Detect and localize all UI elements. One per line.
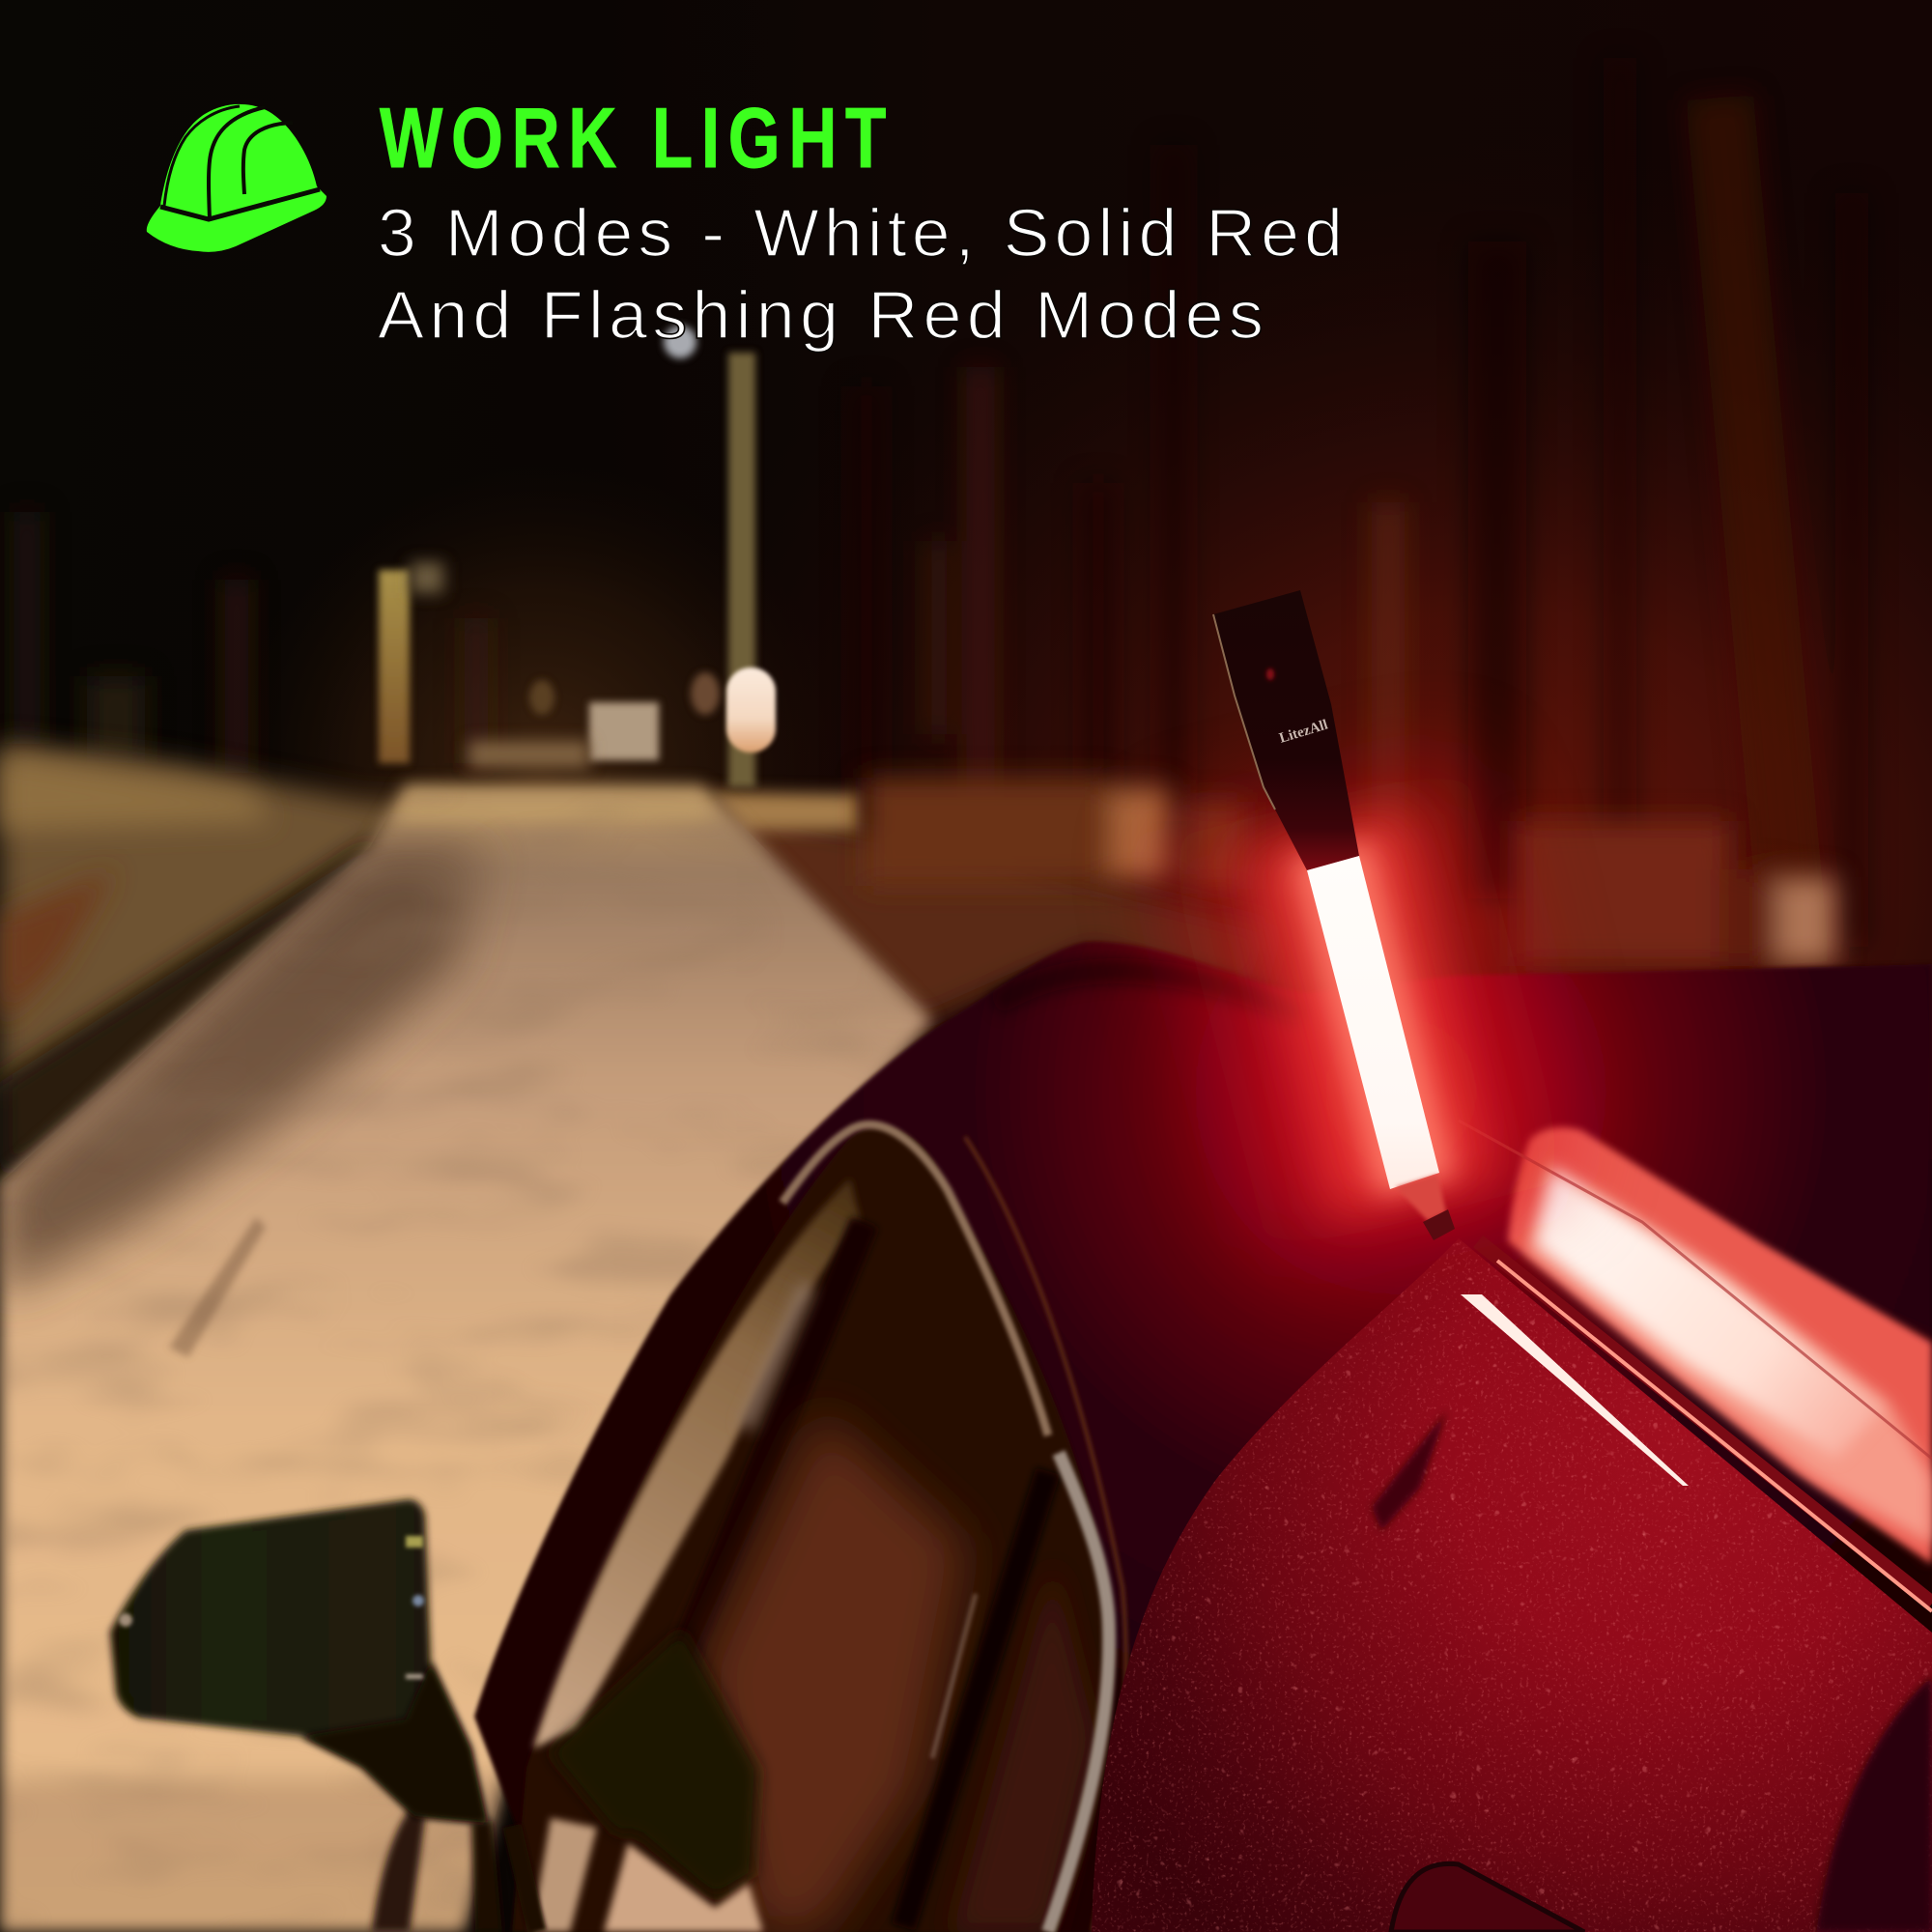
road seen through front glass: [533, 1179, 860, 1748]
red light glow: [1314, 802, 1420, 1217]
icon: hard hat: [147, 104, 327, 252]
car body: [474, 942, 1932, 1932]
street lights and poles: [379, 326, 776, 787]
car hood fender: [1063, 1208, 1932, 1932]
far hood dark red panel: [1739, 1256, 1932, 1565]
blurred snowbanks: [865, 778, 1835, 966]
bright streak on hood: [1461, 1294, 1689, 1486]
mirror mount and lower glass: [512, 1629, 763, 1932]
brand label: LitezAll: [1277, 717, 1330, 747]
flashlight: [1213, 590, 1455, 1240]
road: [0, 784, 966, 1932]
car side window: [512, 1124, 1126, 1932]
door handle outline: [1391, 1863, 1584, 1932]
far-left lower door posts: [372, 1803, 502, 1932]
roof rail: [995, 971, 1304, 1014]
description text: And Flashing Red Modes: [378, 277, 1268, 353]
roadside ground right: [696, 792, 1275, 1024]
flashlight neck: [1396, 1175, 1446, 1221]
windshield light reflection: [1459, 1121, 1932, 1611]
flashlight light bar: [1307, 856, 1439, 1189]
brown interior reflection: [700, 1412, 966, 1932]
side mirror: [110, 1499, 487, 1823]
description text: 3 Modes - White, Solid Red: [378, 195, 1348, 270]
roadside ground left: [0, 744, 454, 1188]
window trim arcs: [782, 1124, 1048, 1435]
flashlight base ring: [1423, 1209, 1455, 1240]
description text: [378, 195, 1348, 353]
flashlight body: [1213, 590, 1359, 870]
far door edge dark: [1816, 1676, 1932, 1932]
title: WORK LIGHT: [380, 90, 895, 185]
